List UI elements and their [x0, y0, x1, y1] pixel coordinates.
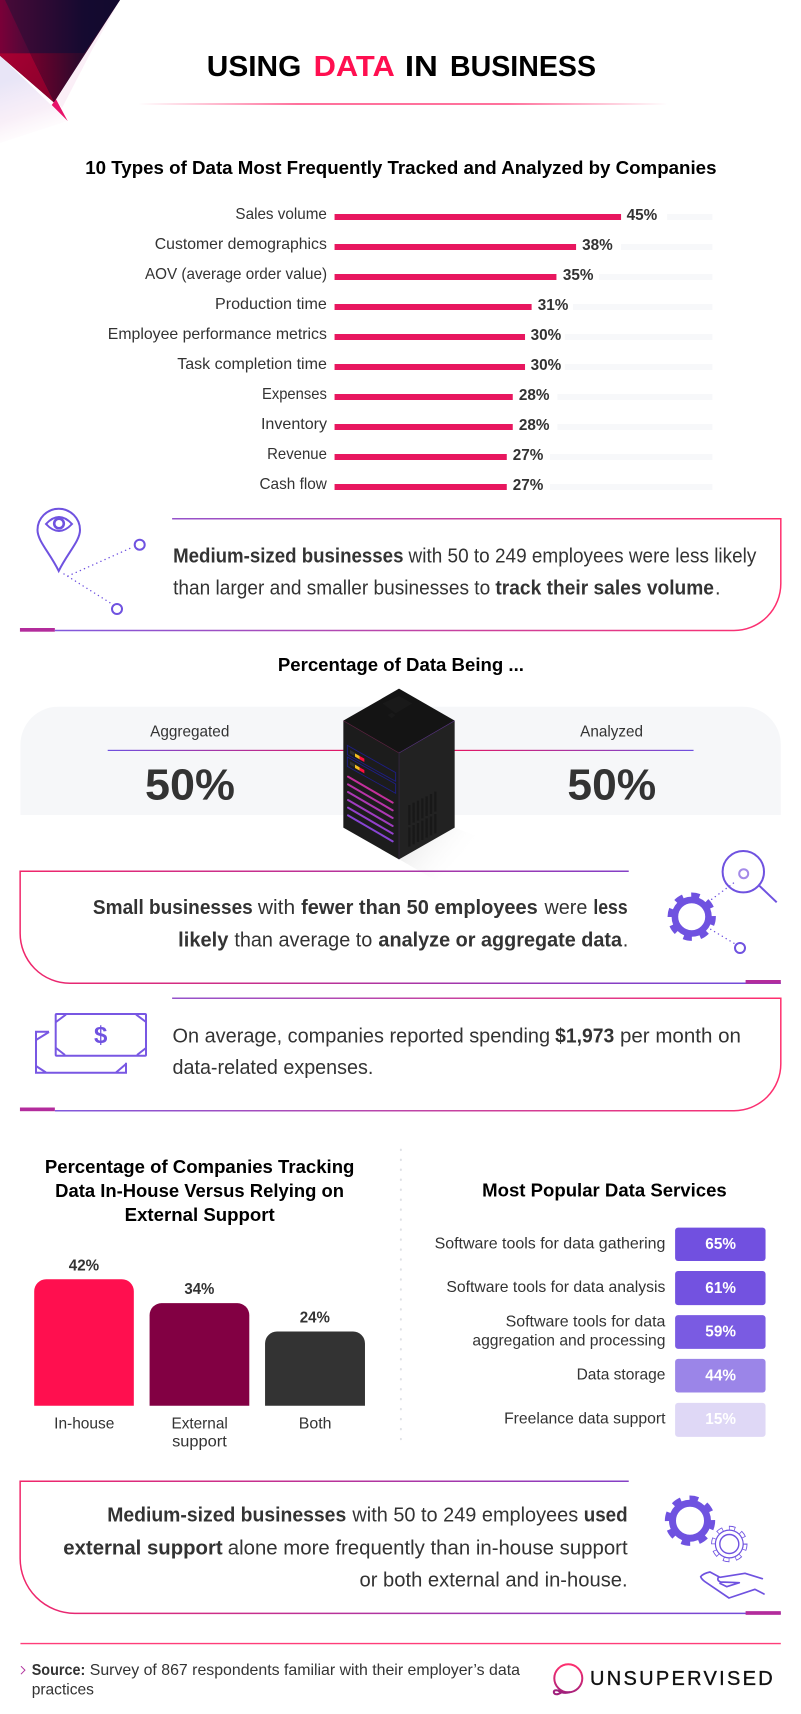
row labels: Expenses — [262, 386, 327, 403]
heading: companies tracking data: External Support — [125, 1204, 275, 1225]
callout: spending: $1,973 — [555, 1025, 614, 1047]
callout: medium businesses external support: Medium-sized businesses — [107, 1504, 346, 1526]
callout: medium businesses external support: with 50 to 249 employees — [351, 1504, 578, 1526]
row values: 28% — [519, 417, 550, 434]
title: IN — [405, 51, 438, 83]
callout: medium businesses external support: or both external and in-house. — [359, 1569, 628, 1591]
heading: top 10 types: 10 Types of Data Most Frequently Tracked and Analyzed by Companies — [85, 157, 716, 178]
callout: medium businesses sales volume: Medium-sized businesses — [173, 545, 403, 567]
table: data services: 59% — [705, 1323, 736, 1340]
callout: small businesses: fewer than 50 employees — [301, 897, 538, 919]
row labels: Customer demographics — [155, 236, 327, 253]
row labels: Cash flow — [259, 476, 327, 493]
row labels: Task completion time — [177, 356, 327, 373]
decoration: corner triangle — [0, 0, 120, 143]
callout: medium businesses external support — [20, 1481, 781, 1615]
table: data services: 44% — [705, 1367, 736, 1384]
bar chart: in-house vs external: External — [172, 1416, 228, 1433]
bar chart: types of data — [108, 206, 712, 494]
table: data services: Software tools for data — [506, 1314, 666, 1331]
table: data services: 15% — [705, 1411, 736, 1428]
row values: 38% — [582, 237, 613, 254]
callout: medium businesses external support: alone more frequently than in-house support — [228, 1537, 628, 1559]
row values: 27% — [513, 447, 544, 464]
panel: aggregated and analyzed: 50% — [567, 760, 656, 809]
panel: aggregated and analyzed: Analyzed — [580, 724, 643, 741]
bar chart: in-house vs external: 24% — [300, 1309, 330, 1326]
callout: small businesses: analyze or aggregate data — [378, 930, 623, 952]
callout: medium businesses external support: external support — [63, 1537, 223, 1559]
icon: money bills: $ — [94, 1022, 108, 1049]
table: data services: 65% — [705, 1236, 736, 1253]
row values: 30% — [531, 327, 561, 344]
table: data services — [435, 1228, 766, 1437]
panel: aggregated and analyzed: Aggregated — [150, 724, 229, 741]
row values: 45% — [627, 207, 657, 224]
callout: small businesses: with — [257, 897, 295, 919]
callout: small businesses: less — [593, 897, 628, 919]
table: data services: Freelance data support — [504, 1411, 666, 1428]
row labels — [108, 206, 327, 493]
table: data services: Software tools for data analysis — [446, 1279, 665, 1296]
row labels: AOV (average order value) — [145, 266, 327, 283]
panel: aggregated and analyzed: 50% — [145, 760, 235, 809]
heading: data services: Most Popular Data Services — [482, 1179, 727, 1200]
row labels: Sales volume — [235, 206, 327, 223]
row labels: Revenue — [267, 446, 327, 463]
icon: server rack — [343, 689, 480, 880]
callout: spending: per month on — [620, 1025, 741, 1047]
bar chart: in-house vs external: support — [172, 1433, 227, 1450]
title — [207, 51, 596, 83]
bar chart: in-house vs external — [34, 1257, 365, 1450]
callout: medium businesses sales volume: . — [715, 577, 721, 599]
row labels: Production time — [215, 296, 327, 313]
panel: aggregated and analyzed — [20, 707, 781, 815]
callout: small businesses: Small businesses — [93, 897, 253, 919]
bars — [335, 214, 621, 490]
callout: small businesses: were — [543, 897, 587, 919]
callout: small businesses: than average to — [234, 930, 372, 952]
row labels: Inventory — [261, 416, 327, 433]
heading: companies tracking data: Percentage of Companies Tracking — [45, 1156, 354, 1177]
row values: 35% — [563, 267, 594, 284]
table: data services: aggregation and processing — [472, 1333, 665, 1350]
source note: Source: — [32, 1662, 85, 1679]
heading: percentage of data being: Percentage of Data Being ... — [278, 654, 524, 675]
bar chart: in-house vs external: 34% — [184, 1281, 215, 1298]
bar chart: in-house vs external: Both — [299, 1416, 331, 1433]
icon: gear and magnifier — [670, 851, 777, 953]
row values: 27% — [513, 477, 544, 494]
icon: money bills — [36, 1014, 146, 1073]
callout: medium businesses sales volume: than larger and smaller businesses to — [173, 577, 490, 599]
icon: gears and hand — [668, 1498, 764, 1598]
callout: small businesses: . — [623, 930, 628, 952]
icon: map pin with eye — [38, 509, 145, 614]
title: DATA — [314, 51, 395, 83]
callout: spending: On average, companies reported spending — [173, 1025, 550, 1047]
row labels: Employee performance metrics — [108, 326, 327, 343]
callout: medium businesses external support: used — [584, 1504, 628, 1526]
row values: 31% — [538, 297, 569, 314]
callout: small businesses — [20, 871, 781, 984]
callout: spending — [20, 998, 781, 1111]
table: data services: 61% — [705, 1280, 736, 1297]
tracks — [550, 214, 712, 490]
heading: companies tracking data — [45, 1156, 354, 1225]
callout: medium businesses sales volume: with 50 to 249 employees were less likely — [408, 545, 756, 567]
callout: spending: data-related expenses. — [173, 1057, 373, 1079]
table: data services: Software tools for data gathering — [435, 1236, 665, 1253]
callout: small businesses: likely — [178, 930, 228, 952]
logo: unsupervised: UNSUPERVISED — [590, 1668, 773, 1690]
source note: practices — [32, 1681, 94, 1698]
row values: 28% — [519, 387, 550, 404]
title: USING — [207, 51, 301, 83]
logo: unsupervised — [554, 1664, 773, 1694]
heading: companies tracking data: Data In-House Versus Relying on — [55, 1180, 344, 1201]
table: data services: Data storage — [577, 1366, 666, 1383]
bar chart: in-house vs external: 42% — [69, 1257, 99, 1274]
source note — [20, 1643, 781, 1698]
bar chart: in-house vs external: In-house — [54, 1416, 115, 1433]
source note: Survey of 867 respondents familiar with their employer’s data — [90, 1662, 520, 1679]
callout: medium businesses sales volume — [20, 519, 781, 632]
callout: medium businesses sales volume: track their sales volume — [495, 577, 714, 599]
title: BUSINESS — [450, 51, 596, 83]
row values: 30% — [531, 357, 561, 374]
row values — [513, 207, 657, 494]
